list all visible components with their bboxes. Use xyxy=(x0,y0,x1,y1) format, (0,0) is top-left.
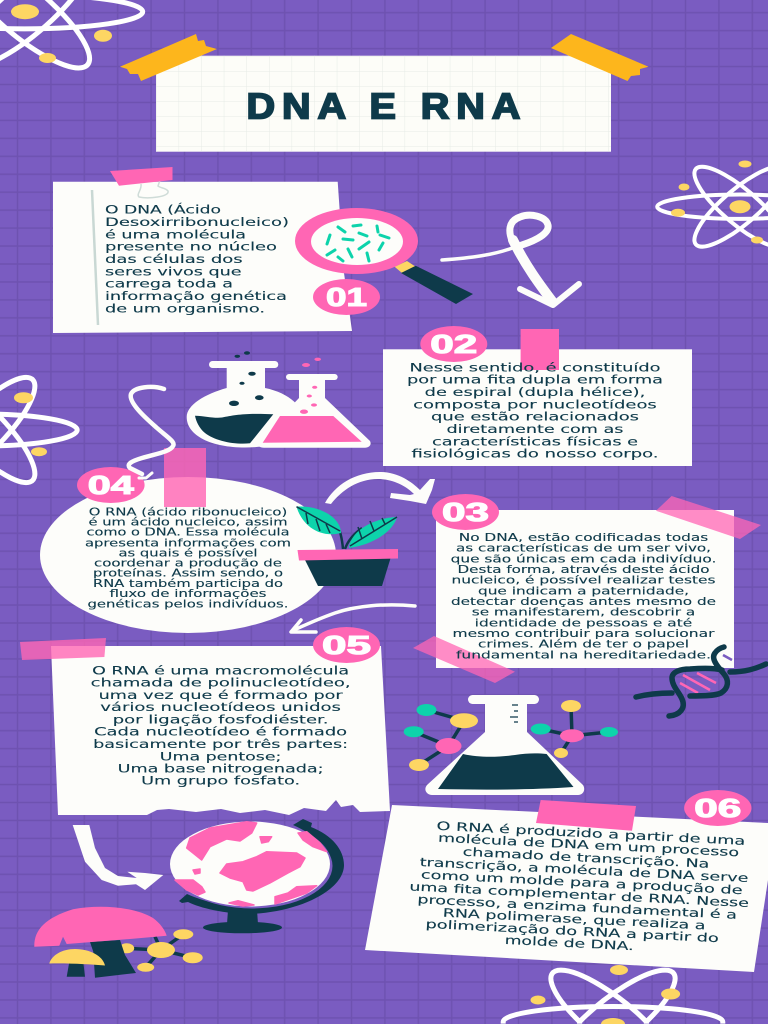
text: note 01: carrega toda a xyxy=(105,277,233,291)
text: note 01: das células dos xyxy=(105,252,243,266)
text: note 01 xyxy=(105,202,289,315)
text: note 02: de espiral (dupla hélice), xyxy=(425,385,645,399)
icon: flask with molecules xyxy=(404,695,618,795)
badge 01: 01 xyxy=(326,282,367,312)
badge 02: 02 xyxy=(430,329,477,359)
icon: flasks xyxy=(187,351,371,448)
text: note 06: transcrição, a molécula de DNA serve xyxy=(419,855,749,885)
icon: mushrooms and molecule xyxy=(34,907,203,978)
text: note 05: vários nucleotídeos unidos xyxy=(100,700,341,714)
text: note 03: detectar doenças antes mesmo de xyxy=(451,597,716,608)
text: note 05: Um grupo fosfato. xyxy=(141,774,300,788)
badge 04 xyxy=(77,467,145,503)
icon: atom middle left xyxy=(0,370,77,490)
icon: atom bottom xyxy=(503,965,723,1024)
text: note 02: que estão relacionados xyxy=(431,410,639,424)
text: note 04: genéticas pelos indivíduos. xyxy=(88,599,288,611)
text: note 01: de um organismo. xyxy=(105,301,265,315)
text: note 02: composta por nucleotídeos xyxy=(413,397,657,411)
title panel xyxy=(120,34,648,152)
text: note 02: características físicas e xyxy=(432,434,638,448)
text: note 03: as características de um ser vivo, xyxy=(456,543,711,555)
badge 02 xyxy=(420,326,487,362)
text: note 06: polimerização do RNA a partir do xyxy=(425,917,719,945)
text: note 03: identidade de pessoas e até xyxy=(475,617,692,629)
text: note 03: se manifestarem, descobrir a xyxy=(472,608,695,619)
text: note 03: que indicam a paternidade, xyxy=(478,586,689,597)
text: note 03: mesmo contribuir para solucionar xyxy=(452,629,716,640)
badge 01 xyxy=(313,279,380,315)
panel: note 01 xyxy=(53,167,352,333)
panel: note 05 xyxy=(20,638,390,815)
text: note 05 xyxy=(91,663,351,788)
text: note 04: fluxo de informações xyxy=(110,589,266,600)
badge 05 xyxy=(313,627,380,663)
text: note 05: Uma base nitrogenada; xyxy=(118,761,324,775)
text: note 06: molde de DNA. xyxy=(504,933,634,953)
panel: note 04 xyxy=(40,448,336,633)
text: note 06: processo, a enzima fundamental é a xyxy=(417,892,737,922)
arrow: 01 to 02 xyxy=(442,215,579,305)
badge 06 xyxy=(684,790,752,826)
text: note 03 xyxy=(451,533,716,661)
text: note 01: O DNA (Ácido xyxy=(105,202,221,217)
arrow: 04 to 05 xyxy=(291,605,415,632)
text: note 03: fundamental na hereditariedade. xyxy=(456,650,711,661)
badge 06: 06 xyxy=(694,793,741,823)
text: note 06 xyxy=(409,819,749,953)
text: note 01: informação genética xyxy=(105,289,287,303)
text: note 01: é uma molécula xyxy=(105,227,246,241)
text: note 04: RNA também participa do xyxy=(93,578,283,590)
text: note 03: crimes. Além de ter o papel xyxy=(478,639,689,651)
text: note 02 xyxy=(407,360,663,461)
text: note 06: como um molde para a produção de xyxy=(421,867,743,897)
badge 05: 05 xyxy=(322,630,371,660)
text: note 04: apresenta informações com xyxy=(85,538,291,549)
text: note 05: O RNA é uma macromolécula xyxy=(92,663,349,677)
text: note 06: O RNA é produzido a partir de uma xyxy=(436,819,746,848)
icon: atom middle right xyxy=(657,160,768,252)
icon: magnifying glass xyxy=(295,208,473,304)
title text: DNA E RNA xyxy=(246,87,527,127)
text: note 04: O RNA (ácido ribonucleico) xyxy=(89,506,287,518)
text: note 02: fisiológicas do nosso corpo. xyxy=(412,447,658,461)
text: note 02: diretamente com as xyxy=(446,422,624,436)
text: note 05: por ligação fosfodiéster. xyxy=(113,712,328,726)
text: note 05: Cada nucleotídeo é formado xyxy=(94,725,347,739)
panel: note 02 xyxy=(383,329,692,466)
text: note 05: chamada de polinucleotídeo, xyxy=(91,676,351,690)
text: note 04 xyxy=(85,506,291,611)
text: note 04: é um ácido nucleico, assim xyxy=(88,517,288,529)
icon: plant xyxy=(296,507,398,586)
arrow: 02 to 03 xyxy=(325,472,435,504)
text: note 06: uma fita complementar de RNA. Nesse xyxy=(409,879,749,910)
panel: note 06 xyxy=(365,800,768,972)
badge 03 xyxy=(432,494,499,530)
badge 04: 04 xyxy=(88,470,135,500)
text: note 03: que são únicas em cada indivíduo. xyxy=(451,553,716,565)
text: note 01: Desoxirribonucleico) xyxy=(105,215,289,229)
text: note 03: nucleico, é possível realizar testes xyxy=(452,575,716,587)
badge 03: 03 xyxy=(442,497,489,527)
text: note 02: Nesse sentido, é constituído xyxy=(410,360,660,374)
icon: globe xyxy=(170,819,344,933)
text: note 06: molécula de DNA em um processo xyxy=(438,831,740,859)
text: note 01: seres vivos que xyxy=(105,264,242,278)
text: note 04: as quais é possível xyxy=(118,548,258,560)
text: note 05: basicamente por três partes: xyxy=(93,737,348,751)
text: note 05: Uma pentose; xyxy=(160,749,281,763)
text: note 06: RNA polimerase, que realiza a xyxy=(443,906,706,932)
text: note 03: No DNA, estão codificadas todas xyxy=(459,533,708,544)
text: note 02: por uma fita dupla em forma xyxy=(407,373,663,387)
icon: atom top left xyxy=(0,0,143,76)
text: note 05: uma vez que é formado por xyxy=(99,688,343,702)
text: note 04: coordenar a produção de xyxy=(94,559,282,570)
icon: DNA helix xyxy=(636,647,766,716)
arrow: 05 to globe xyxy=(73,825,163,890)
arrow: squiggle to 04 xyxy=(129,387,174,478)
text: note 01: presente no núcleo xyxy=(105,240,277,254)
text: note 04: como o DNA. Essa molécula xyxy=(86,527,290,539)
panel: note 03 xyxy=(413,496,761,683)
text: note 04: proteínas. Assim sendo, o xyxy=(93,568,283,580)
text: note 03: Desta forma, através deste ácido xyxy=(458,564,710,576)
text: note 06: chamado de transcrição. Na xyxy=(462,845,710,871)
